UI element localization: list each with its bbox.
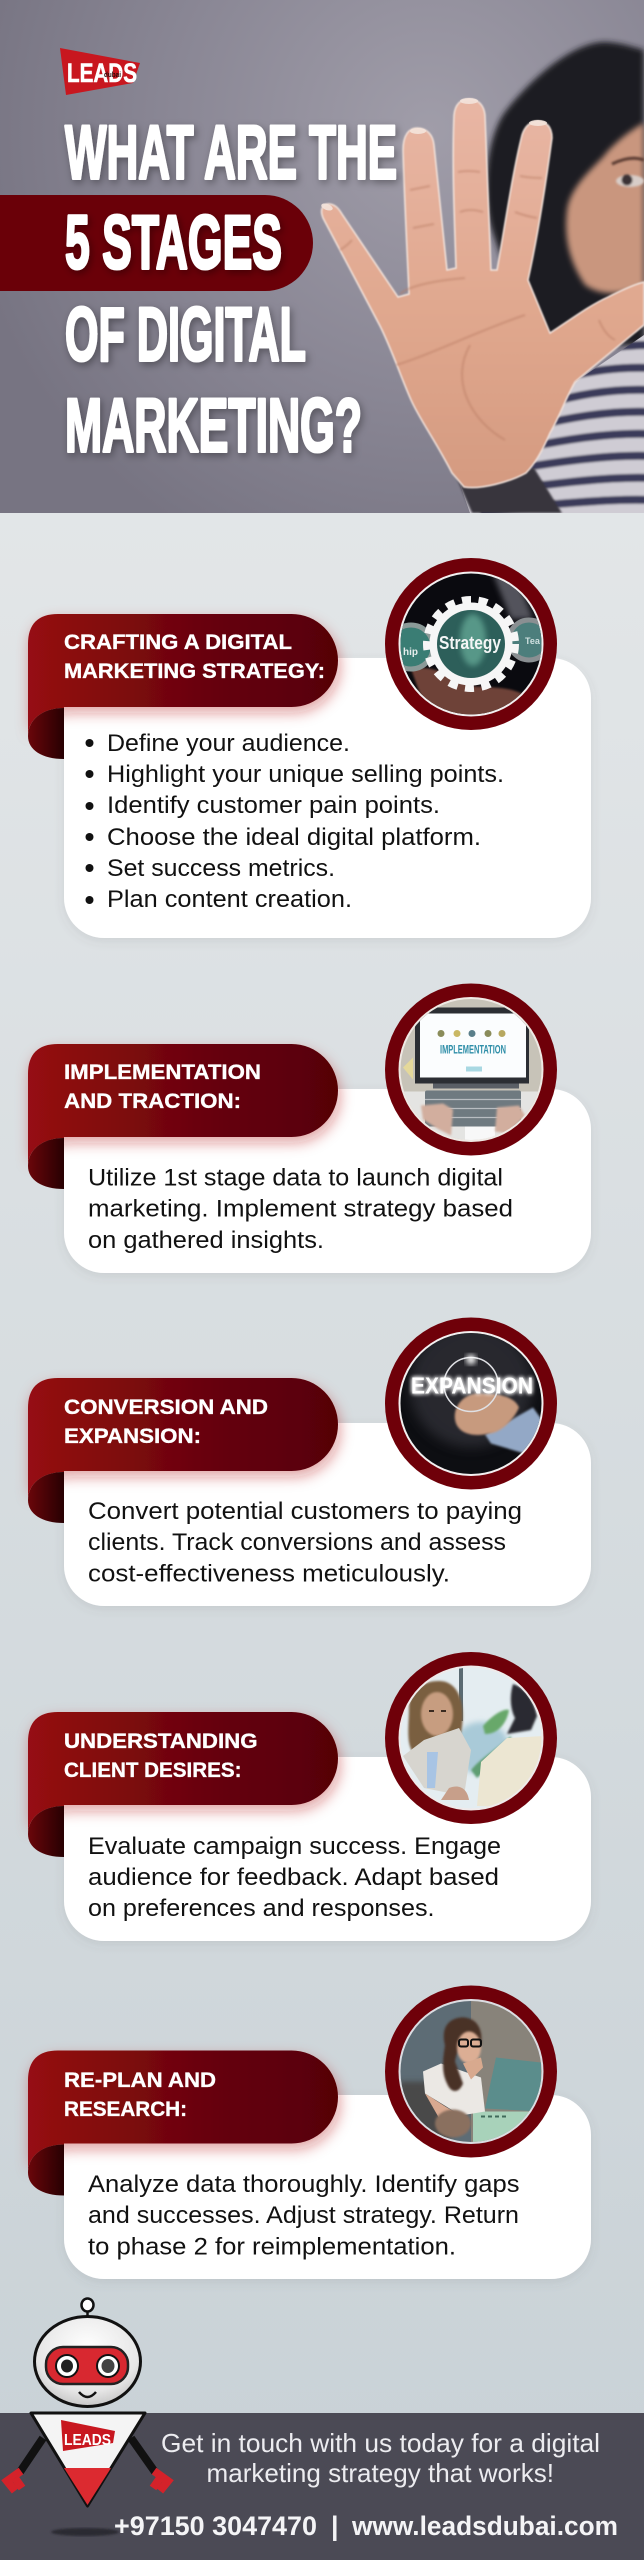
footer contact line [114, 2511, 618, 2541]
bullet list: Define your audience. [107, 730, 350, 757]
footer band [0, 2413, 644, 2560]
ribbon heading: CONVERSION AND [64, 1395, 268, 1419]
ribbon heading: RESEARCH: [64, 2097, 187, 2121]
footer call to action: marketing strategy that works! [206, 2458, 554, 2488]
ribbon heading: CLIENT DESIRES: [64, 1758, 242, 1782]
antenna [82, 2298, 94, 2318]
bullet list [86, 730, 504, 913]
logo wordmark: LEADS [67, 58, 137, 88]
ribbon heading [28, 2050, 338, 2196]
hair [486, 42, 644, 345]
hero background [0, 0, 644, 513]
ribbon heading: AND TRACTION: [64, 1089, 241, 1113]
bullet list: Plan content creation. [107, 886, 352, 913]
body text: to phase 2 for reimplementation. [88, 2234, 456, 2260]
body text: on preferences and responses. [88, 1895, 434, 1922]
card [64, 1757, 591, 1941]
photo: strategy gear: Strategy [439, 633, 501, 653]
body text: Analyze data thoroughly. Identify gaps [88, 2171, 520, 2198]
logo flag [60, 48, 140, 95]
body lower red panel [64, 2468, 111, 2505]
palm lines [340, 171, 615, 440]
arms [20, 2438, 155, 2472]
panel: stage 4 [28, 1652, 591, 1941]
body text: and successes. Adjust strategy. Return [88, 2202, 519, 2229]
ribbon heading [28, 1712, 338, 1857]
photo: strategy gear: Tea [525, 636, 541, 646]
panel: stage 3 [28, 1318, 591, 1606]
footer contact line: +97150 3047470 [114, 2511, 317, 2541]
body text: on gathered insights. [88, 1227, 324, 1254]
photo: woman thinking at laptop [385, 1986, 557, 2158]
title: WHAT ARE THE [65, 110, 397, 196]
panel: hero [0, 0, 644, 520]
chest logo: LEADS [64, 2432, 111, 2449]
body text [88, 2171, 520, 2260]
photo: laptop implementation: IMPLEMENTATION [440, 1044, 506, 1056]
claws [7, 2471, 168, 2491]
ribbon heading [28, 1044, 338, 1189]
photo: woman raising her hand [320, 42, 644, 520]
title [65, 110, 397, 468]
smile [79, 2392, 96, 2397]
fingernails [320, 98, 547, 212]
ribbon heading: EXPANSION: [64, 1424, 201, 1448]
shadow [51, 2528, 119, 2536]
footer call to action: Get in touch with us today for a digital [161, 2428, 600, 2458]
eyes [56, 2355, 119, 2377]
ribbon heading: IMPLEMENTATION [64, 1060, 261, 1084]
photo: expansion: EXPANSION [411, 1372, 533, 1398]
bullet list: Identify customer pain points. [107, 792, 440, 819]
body [31, 2413, 145, 2506]
photo: laptop implementation [385, 984, 557, 1156]
body text: Utilize 1st stage data to launch digital [88, 1164, 503, 1192]
ribbon heading: MARKETING STRATEGY: [64, 659, 325, 683]
eye [612, 158, 644, 187]
logo [60, 48, 140, 95]
highlight pill [0, 195, 313, 291]
title: 5 STAGES [65, 200, 282, 286]
panel: stage 2 [28, 984, 591, 1273]
bullet list: Set success metrics. [107, 855, 335, 882]
ribbon heading [28, 614, 338, 759]
photo: expansion [385, 1318, 557, 1490]
visor [46, 2347, 128, 2384]
striped shirt [460, 335, 644, 513]
body text [88, 1164, 513, 1254]
panel: stage 5 [28, 1986, 591, 2279]
card [64, 658, 591, 938]
bullet list: Choose the ideal digital platform. [107, 824, 481, 851]
bullet list: Highlight your unique selling points. [107, 761, 504, 788]
card [64, 1423, 591, 1606]
photo: strategy gear [385, 558, 557, 730]
body text: marketing. Implement strategy based [88, 1196, 513, 1222]
sleeve cuff [454, 468, 562, 513]
footer contact line: | [331, 2511, 339, 2541]
ribbon heading [28, 1378, 338, 1523]
body text: clients. Track conversions and assess [88, 1529, 506, 1556]
photo: strategy gear: hip [403, 647, 418, 658]
ribbon heading: CRAFTING A DIGITAL [64, 630, 292, 654]
hand [322, 99, 644, 488]
footer contact line: www.leadsdubai.com [351, 2511, 618, 2541]
body text: Convert potential customers to paying [88, 1498, 522, 1525]
card [64, 2095, 591, 2279]
logo sub-word: dubai [104, 70, 121, 79]
ribbon heading: UNDERSTANDING [64, 1729, 258, 1753]
body text: audience for feedback. Adapt based [88, 1864, 499, 1891]
title: OF DIGITAL [65, 292, 306, 378]
chest logo [61, 2420, 115, 2451]
title: MARKETING? [65, 384, 362, 468]
panel: stage 1 [28, 558, 591, 938]
face [566, 123, 644, 293]
photo: client conversation [385, 1652, 557, 1824]
card [64, 1089, 591, 1273]
body text [88, 1833, 501, 1922]
body text: cost-effectiveness meticulously. [88, 1560, 450, 1588]
body text: Evaluate campaign success. Engage [88, 1833, 501, 1860]
ribbon heading: RE-PLAN AND [64, 2068, 216, 2092]
robot mascot [7, 2298, 168, 2536]
footer call to action [161, 2428, 600, 2488]
body text [88, 1498, 522, 1588]
head [34, 2316, 140, 2406]
